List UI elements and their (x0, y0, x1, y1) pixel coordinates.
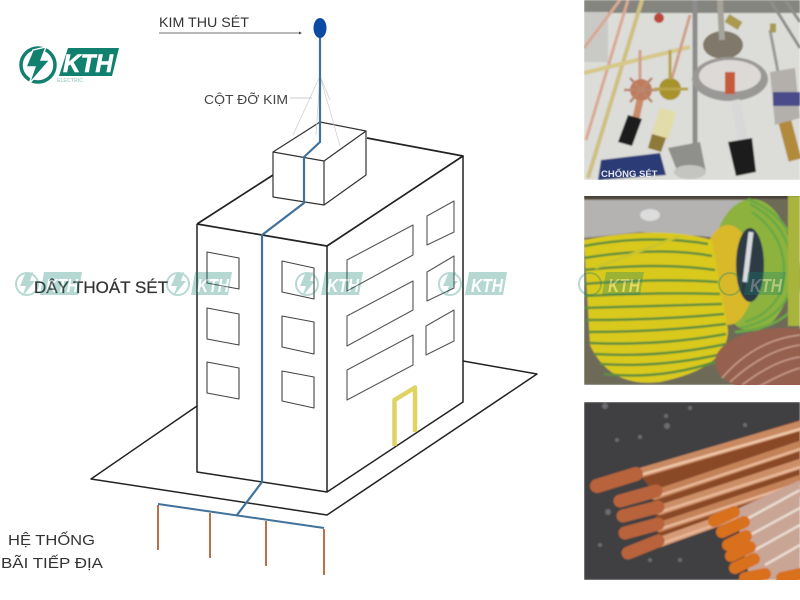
door (394, 388, 415, 446)
front windows (207, 252, 314, 408)
photo: yellow-green earthing cables (584, 196, 800, 396)
label: HỆ THỐNG BÃI TIẾP ĐỊA (1, 531, 103, 572)
support mast guy wires (293, 76, 340, 146)
logo: KTH: KTH (63, 50, 114, 78)
side windows (347, 201, 454, 400)
small green coil (718, 198, 789, 332)
lightning needle tip (314, 18, 326, 38)
watermark 1: KTH (46, 276, 79, 296)
logo: KTH: ELECTRIC (57, 78, 83, 84)
label: KIM THU SÉT (159, 14, 302, 34)
label: DÂY THOÁT SÉT: DÂY THOÁT SÉT (34, 278, 168, 297)
copper rods (597, 426, 800, 553)
earthing rods (158, 505, 324, 575)
penthouse on the roof (273, 122, 366, 205)
photo: copper grounding rods (584, 402, 800, 580)
watermark 2: KTH (197, 276, 230, 296)
watermark 1 (16, 272, 82, 297)
photo caption sign: CHỐNG SÉT (601, 168, 658, 180)
watermark 4: KTH (471, 276, 504, 296)
watermark 5: KTH (608, 276, 641, 296)
watermark 3 (296, 272, 363, 297)
copper coil (714, 328, 800, 385)
ground plane (91, 361, 537, 515)
watermark 4 (439, 272, 507, 297)
logo: KTH (21, 47, 119, 84)
down conductor (237, 36, 320, 515)
watermark 6: KTH (750, 276, 783, 296)
watermark 2 (167, 272, 232, 297)
building diagram (91, 36, 537, 575)
label: HỆ THỐNG BÃI TIẾP ĐỊA: BÃI TIẾP ĐỊA (1, 555, 103, 572)
rods with orange caps (735, 480, 800, 580)
photo: lightning rods and air terminals (584, 0, 800, 180)
label: KIM THU SÉT: KIM THU SÉT (159, 14, 249, 30)
label: CỘT ĐỠ KIM: CỘT ĐỠ KIM (204, 92, 288, 107)
label: HỆ THỐNG BÃI TIẾP ĐỊA: HỆ THỐNG (8, 531, 95, 549)
building body (197, 138, 463, 492)
watermark 3: KTH (327, 276, 360, 296)
watermark 5 (579, 272, 644, 296)
large yellow coil (584, 232, 728, 383)
watermark 6 (719, 272, 786, 296)
copper body backing (636, 420, 800, 548)
earthing rail (158, 504, 324, 528)
